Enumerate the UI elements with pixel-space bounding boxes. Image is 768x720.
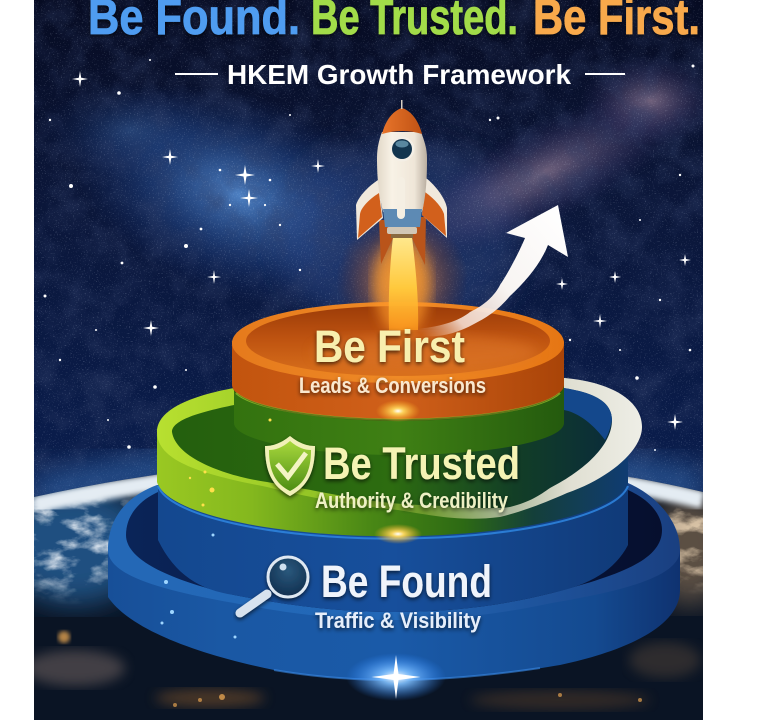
stars bbox=[44, 59, 694, 451]
horizon glow above earth bbox=[34, 453, 703, 493]
label: Be Trusted: Authority & Credibility bbox=[315, 488, 509, 513]
icon: magnifying glass bbox=[240, 557, 308, 613]
label: Be Trusted: Be Trusted bbox=[323, 438, 520, 489]
rocket bbox=[356, 100, 447, 265]
label: Be First: Be First bbox=[314, 321, 465, 372]
flame glow behind rocket bbox=[342, 224, 462, 304]
starry sky background bbox=[34, 0, 703, 497]
tier: Be Found blue ring bbox=[108, 470, 680, 680]
icon: shield with check bbox=[265, 436, 315, 496]
flare: green tier bbox=[374, 524, 422, 544]
tier: Be Trusted green ring bbox=[157, 378, 642, 539]
title bbox=[88, 0, 699, 39]
label: Be First bbox=[299, 321, 486, 398]
label: Be Found: Be Found bbox=[321, 556, 492, 607]
label: Be Found: Traffic & Visibility bbox=[315, 608, 482, 633]
nebula clouds bbox=[34, 0, 720, 500]
label: Be Found bbox=[315, 556, 492, 633]
upward growth arrow bbox=[417, 205, 568, 336]
label: Be First: Leads & Conversions bbox=[299, 373, 486, 398]
rocket flame bbox=[374, 235, 430, 335]
tier: Be First orange ring bbox=[232, 302, 564, 421]
flare: orange tier bbox=[378, 401, 418, 422]
earth bbox=[34, 474, 703, 720]
label: Be Trusted bbox=[315, 438, 520, 513]
subtitle with rules: HKEM Growth Framework bbox=[227, 59, 571, 90]
flare: blue tier bbox=[346, 653, 446, 701]
